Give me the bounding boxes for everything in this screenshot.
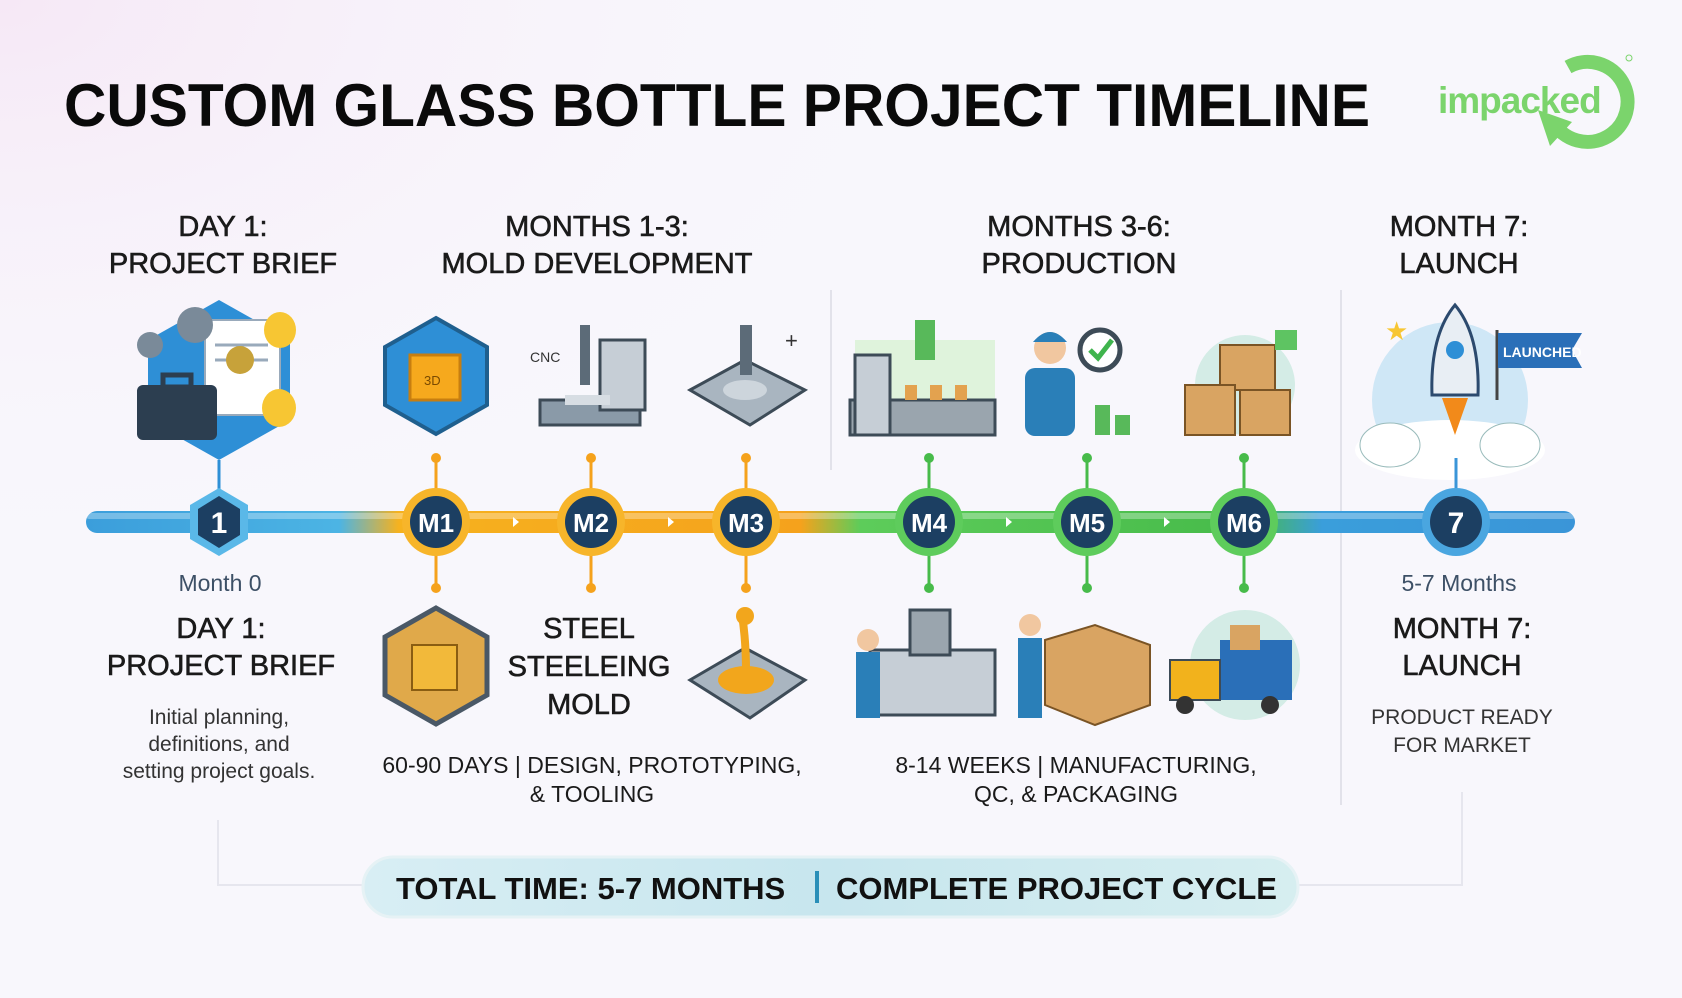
label: 5-7 months: 5-7 Months	[1401, 570, 1517, 596]
text block: launch: MONTH 7:	[1393, 613, 1531, 645]
node 7: 7	[1448, 507, 1464, 540]
node M1: M1	[418, 508, 454, 538]
logo: impacked	[1438, 55, 1632, 146]
phase heading: day 1	[109, 211, 337, 280]
text block: mold summary	[382, 752, 802, 807]
node M5	[1053, 453, 1121, 593]
text block: project brief: definitions, and	[148, 733, 290, 756]
phase heading: months 1-3: MONTHS 1-3:	[505, 211, 689, 243]
total time pill	[363, 857, 1298, 917]
title: CUSTOM GLASS BOTTLE PROJECT TIMELINE	[64, 72, 1370, 139]
phase heading: month 7	[1390, 211, 1528, 280]
phase heading: months 3-6: PRODUCTION	[982, 248, 1176, 280]
icon: mold pour	[690, 325, 805, 425]
node M1	[402, 453, 470, 593]
icon: delivery truck	[1170, 610, 1300, 720]
phase heading: months 3-6: MONTHS 3-6:	[987, 211, 1171, 243]
node M4	[895, 453, 963, 593]
logo: impacked: impacked	[1438, 80, 1601, 121]
icon: QC inspector	[1025, 330, 1130, 436]
text block: launch: FOR MARKET	[1393, 734, 1531, 757]
icon: rocket launch: ★	[1385, 316, 1408, 346]
phase heading: months 1-3: MOLD DEVELOPMENT	[442, 248, 753, 280]
text block: steel mold: STEEL	[543, 613, 635, 645]
text block: steel mold: MOLD	[547, 689, 631, 721]
phase heading: months 1-3	[442, 211, 753, 280]
node M5: M5	[1069, 508, 1105, 538]
text block: production summary: 8-14 WEEKS | MANUFACTURING,	[895, 752, 1257, 778]
icon: mold pour: +	[785, 328, 798, 353]
text block: project brief: DAY 1:	[176, 613, 266, 645]
text block: project brief: setting project goals.	[123, 760, 315, 783]
phase heading: day 1: DAY 1:	[178, 211, 268, 243]
text block: steel mold	[508, 613, 670, 721]
text block: steel mold: STEELEING	[508, 651, 670, 683]
node M6	[1210, 453, 1278, 593]
icon: workers at machines	[856, 610, 995, 718]
node M3	[712, 453, 780, 593]
node 7	[1422, 458, 1490, 556]
phase heading: day 1: PROJECT BRIEF	[109, 248, 337, 280]
icon: rocket launch: LAUNCHED	[1503, 344, 1582, 360]
icon: rocket launch	[1355, 305, 1582, 480]
icon: CNC machine	[530, 325, 645, 425]
node 1: 1	[211, 507, 227, 540]
icon: 3D cad cube	[385, 318, 487, 434]
label: month 0: Month 0	[178, 570, 262, 596]
icon: boxes	[1185, 330, 1297, 435]
total time pill: COMPLETE PROJECT CYCLE	[836, 871, 1277, 906]
text block: production summary	[895, 752, 1257, 807]
text block: project brief: PROJECT BRIEF	[107, 650, 335, 682]
node M4: M4	[911, 508, 948, 538]
text block: mold summary: 60-90 DAYS | DESIGN, PROTOTYPING,	[382, 752, 802, 778]
icon: 3D cad cube: 3D	[424, 373, 441, 388]
icon: steel mold	[385, 608, 487, 724]
text block: mold summary: & TOOLING	[530, 781, 654, 807]
node M2: M2	[573, 508, 609, 538]
icon: project brief	[137, 300, 296, 490]
phase heading: month 7: MONTH 7:	[1390, 211, 1528, 243]
phase heading: months 3-6	[982, 211, 1176, 280]
text block: launch	[1371, 613, 1553, 757]
text block: project brief: Initial planning,	[149, 706, 289, 729]
total time pill: TOTAL TIME: 5-7 MONTHS	[396, 871, 785, 906]
node M2	[557, 453, 625, 593]
node 1	[190, 488, 248, 556]
icon: production line	[850, 320, 995, 435]
text block: production summary: QC, & PACKAGING	[974, 781, 1178, 807]
timeline bar	[86, 511, 1575, 533]
phase heading: month 7: LAUNCH	[1399, 248, 1519, 280]
icon: CNC machine: CNC	[530, 349, 560, 365]
text block: project brief	[107, 613, 335, 783]
text block: launch: LAUNCH	[1402, 650, 1522, 682]
icon: molten pour	[690, 607, 805, 718]
node M3: M3	[728, 508, 764, 538]
icon: worker with boxes	[1018, 614, 1150, 725]
node M6: M6	[1226, 508, 1262, 538]
text block: launch: PRODUCT READY	[1371, 706, 1553, 729]
